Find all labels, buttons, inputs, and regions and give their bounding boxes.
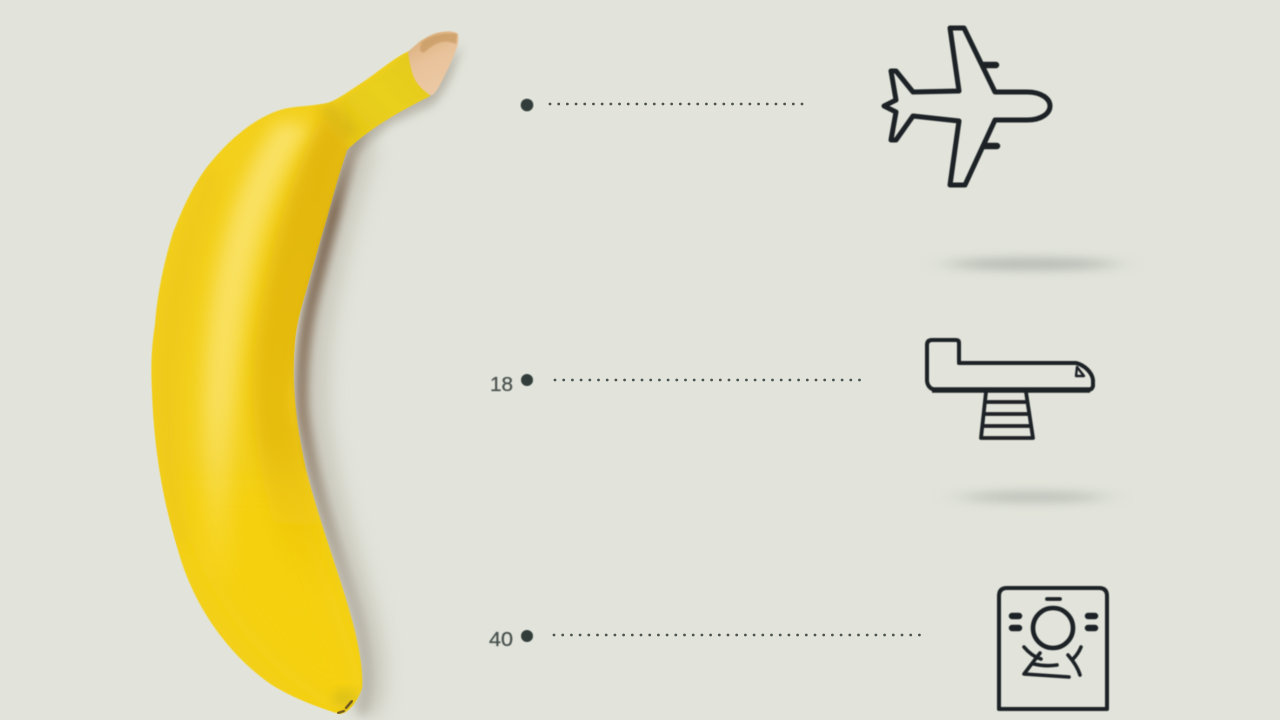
golden right side (253, 112, 352, 610)
blurred shadow under airplane (948, 258, 1116, 270)
tip green (333, 690, 357, 706)
connector: bottom row (489, 629, 922, 651)
stem joint (320, 100, 354, 138)
right pills (1088, 616, 1095, 628)
marker dot (521, 630, 533, 642)
lower engine (984, 143, 997, 149)
banana body (151, 50, 430, 714)
connector: top row (521, 99, 803, 111)
dotted line (550, 103, 803, 105)
banana wide cast shadow (315, 150, 372, 705)
window mark (1076, 367, 1084, 376)
label 40: 40 (489, 629, 513, 651)
infographic canvas (150, 24, 1118, 720)
lower saturated tone (170, 480, 365, 715)
fuselage heavy underside (932, 387, 1090, 393)
banana shading (152, 48, 432, 715)
banana near shadow (302, 125, 366, 708)
label 18: 18 (490, 374, 513, 396)
left edge tone (152, 166, 208, 550)
upper edge warm (296, 152, 346, 468)
top dash (1047, 597, 1060, 601)
blurred shadow under stairs (961, 492, 1105, 502)
porthole (1033, 608, 1073, 648)
banana crown (408, 31, 458, 95)
highlight band (202, 122, 310, 590)
dotted line (554, 634, 922, 636)
banana illustration (151, 31, 462, 715)
stem shadow (345, 44, 462, 155)
banana tip (338, 701, 352, 713)
lower right arm (1068, 647, 1081, 675)
icon: boarding stairs (927, 340, 1093, 438)
marker dot (521, 99, 533, 111)
dotted line (555, 379, 865, 381)
icon: airplane (884, 28, 1050, 185)
upper engine (984, 62, 996, 68)
stem tone (340, 48, 432, 150)
connector: middle row (490, 374, 865, 396)
lower left arm (1024, 647, 1069, 677)
marker dot (521, 374, 533, 386)
stairs (981, 392, 1033, 438)
icon: framed round figure (999, 588, 1107, 709)
left pills (1012, 616, 1019, 628)
crown rough top (420, 33, 457, 53)
